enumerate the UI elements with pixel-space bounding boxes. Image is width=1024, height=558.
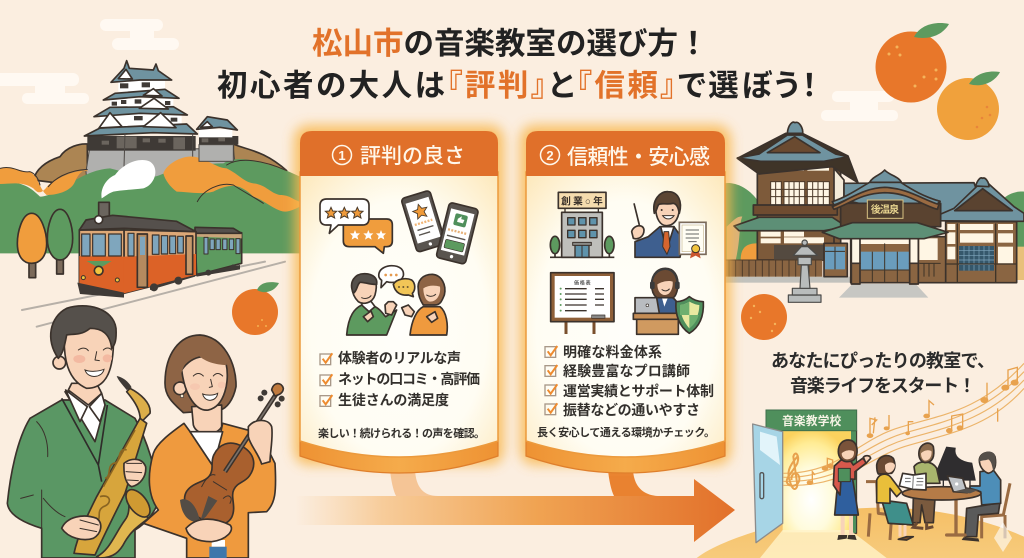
floor xyxy=(697,508,1024,558)
closing message: あなたにぴったりの教室で、 xyxy=(771,351,995,371)
woman hands xyxy=(186,420,272,542)
Dogo onsen building xyxy=(724,122,1024,302)
woman head xyxy=(168,338,227,410)
checklist: 生徒さんの満足度 xyxy=(338,392,449,408)
man hands xyxy=(62,459,146,540)
central entrance xyxy=(822,170,948,284)
connector from panel 1 xyxy=(390,470,438,496)
arrow xyxy=(295,470,735,542)
man head xyxy=(51,306,116,388)
checklist xyxy=(545,344,714,418)
panel heading xyxy=(300,131,498,176)
icon: professional teacher xyxy=(632,192,706,258)
icon: support staff and shield xyxy=(633,268,703,334)
connector from panel 2 xyxy=(608,470,660,496)
piano xyxy=(937,447,975,488)
right wing xyxy=(931,178,1024,283)
music school scene xyxy=(697,363,1024,558)
saxophone xyxy=(74,376,155,558)
icons xyxy=(320,190,479,335)
sign xyxy=(766,410,857,431)
panel note: 長く安心して通える環境かチェック。 xyxy=(537,425,715,439)
checklist: 経験豊富なプロ講師 xyxy=(563,363,690,379)
scene: castle, hills and train xyxy=(0,61,300,327)
teacher xyxy=(833,440,871,540)
watermark sparkle xyxy=(994,522,1012,552)
trees xyxy=(17,209,73,278)
man seated right xyxy=(962,452,1010,542)
castle xyxy=(84,61,238,167)
school door and sign xyxy=(753,410,887,558)
smoke xyxy=(101,160,155,198)
arrow body xyxy=(295,479,735,542)
checklist: 振替などの通いやすさ xyxy=(563,402,700,418)
checklist: 明確な料金体系 xyxy=(563,344,662,360)
icon: star speech bubbles xyxy=(320,199,392,253)
back roof xyxy=(844,183,987,220)
panel: trust xyxy=(520,125,731,473)
rails xyxy=(22,262,285,327)
stone ground xyxy=(724,277,851,283)
panel lip xyxy=(526,438,725,473)
mikan lower right xyxy=(741,294,787,340)
title: 初心者の大人は『評判』と『信頼』で選ぼう！ xyxy=(217,69,817,103)
mikans top right xyxy=(876,23,1000,140)
icon: established school building xyxy=(550,192,614,257)
closing message: 音楽ライフをスタート！ xyxy=(790,376,976,396)
icon: review phones xyxy=(401,190,479,264)
checklist: 運営実績とサポート体制 xyxy=(563,383,714,399)
sign: 後温泉 xyxy=(871,203,899,216)
music notes xyxy=(787,367,1018,489)
seated woman middle xyxy=(913,443,940,528)
music staff xyxy=(783,363,1024,486)
sign: 音楽教学校 xyxy=(782,414,842,428)
closing message xyxy=(771,351,995,396)
stone lantern xyxy=(788,240,821,302)
icon: price board xyxy=(551,273,614,334)
panel note: 楽しい！続けられる！の声を確認。 xyxy=(318,426,485,440)
icon: two people talking xyxy=(347,266,447,335)
train xyxy=(77,202,242,298)
panel heading: 1 xyxy=(338,148,346,163)
fence xyxy=(724,260,822,277)
panel heading xyxy=(526,131,725,176)
violin xyxy=(178,384,285,532)
clouds xyxy=(0,19,898,121)
man with saxophone xyxy=(7,306,159,558)
title xyxy=(217,27,817,103)
panel body xyxy=(526,172,725,457)
woman with violin xyxy=(143,335,285,558)
mikan left xyxy=(232,282,279,335)
checklist xyxy=(320,350,480,408)
hills xyxy=(0,144,300,253)
tall wing xyxy=(734,122,858,260)
panel heading: 評判の良さ xyxy=(360,145,465,168)
panel heading: 信頼性・安心感 xyxy=(567,145,710,169)
title: 松山市の音楽教室の選び方！ xyxy=(312,27,708,61)
table with score and laptop xyxy=(899,473,981,535)
checklist: ネットの口コミ・高評価 xyxy=(338,371,480,387)
panel lip xyxy=(300,438,498,473)
sign text: 創業○年 xyxy=(561,195,603,207)
checklist: 体験者のリアルな声 xyxy=(338,350,461,366)
panel: reputation xyxy=(294,125,504,473)
icon: price board: 価格表 xyxy=(574,280,591,287)
trees behind xyxy=(724,183,1024,280)
panel heading: 2 xyxy=(546,148,554,163)
panel body xyxy=(300,172,498,457)
seated woman left xyxy=(866,456,913,540)
icons xyxy=(550,192,706,334)
